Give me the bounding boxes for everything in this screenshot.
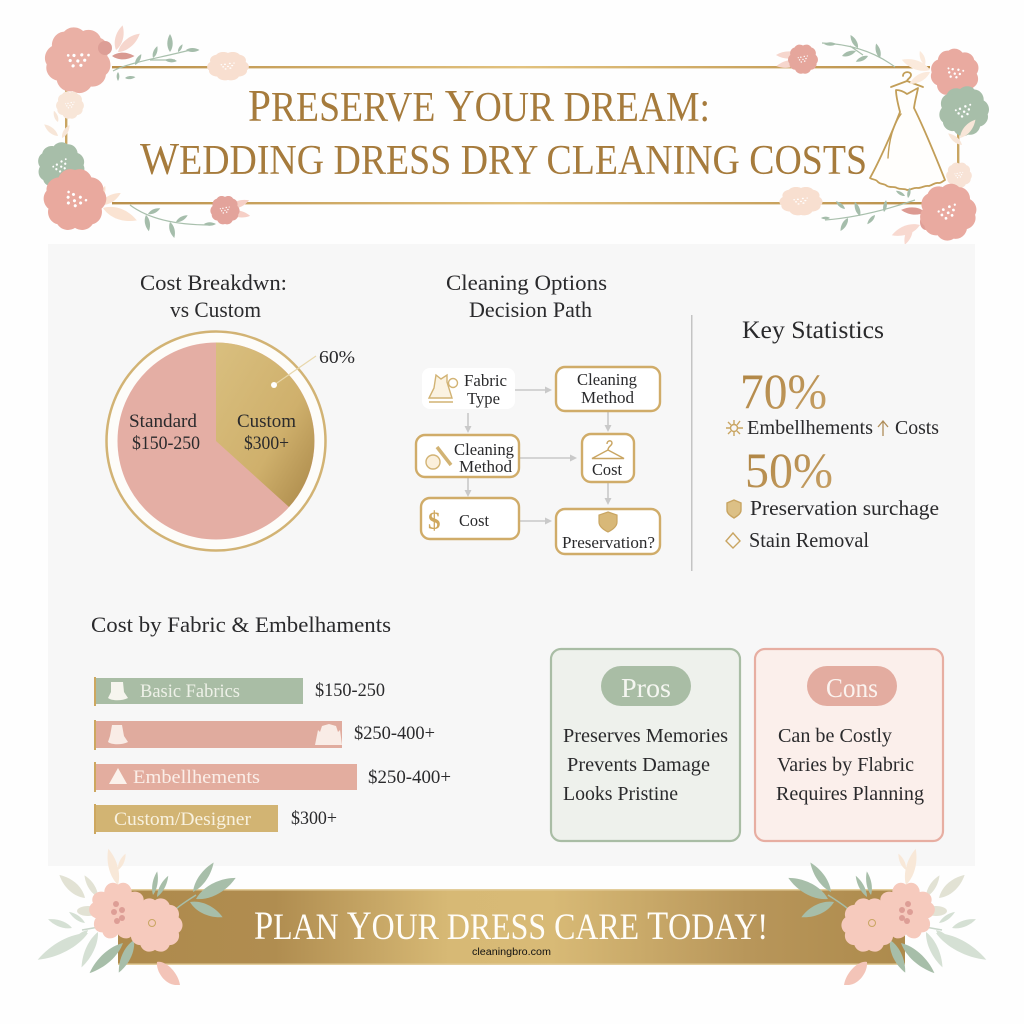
list: cons: Requires Planning xyxy=(776,783,924,805)
node: cleaning method left xyxy=(416,435,519,477)
heading: cleaning options: Cleaning Options xyxy=(446,270,607,295)
node: cost middle xyxy=(582,434,634,482)
node: fabric type: Fabric xyxy=(464,371,507,390)
main panel background xyxy=(48,244,975,866)
stat: 50 percent: Preservation surchage xyxy=(750,496,939,520)
bar: basic fabrics: Basic Fabrics xyxy=(140,681,240,702)
list: cons xyxy=(776,725,924,805)
bar: basic fabrics xyxy=(94,677,385,706)
node: preservation xyxy=(556,509,660,554)
panel: key statistics xyxy=(726,317,939,552)
node: cost lower xyxy=(421,498,519,539)
node: cost lower: $ xyxy=(428,508,440,535)
header frame lines xyxy=(65,66,959,204)
title: WEDDING DRESS DRY CLEANING COSTS xyxy=(140,133,867,184)
pie chart: $150-250 xyxy=(132,433,200,454)
pie chart: Custom xyxy=(237,411,296,432)
list: pros: Preserves Memories xyxy=(563,725,728,747)
list: cons: Varies by Flabric xyxy=(777,754,914,776)
heading: cost breakdown xyxy=(140,270,287,322)
stat: 50 percent: 50% xyxy=(745,442,833,498)
panel: cost breakdown pie xyxy=(106,270,355,550)
badge: pros: Pros xyxy=(621,673,671,703)
bar: embellishments: $250-400+ xyxy=(368,767,451,788)
footer banner xyxy=(118,889,905,965)
footer banner: PLAN YOUR DRESS CARE TODAY! xyxy=(254,903,768,948)
heading: key statistics: Key Statistics xyxy=(742,317,884,344)
list: pros: Prevents Damage xyxy=(567,754,710,776)
heading: cost breakdown: Cost Breakdwn: xyxy=(140,270,287,295)
node: preservation: Preservation? xyxy=(562,533,655,552)
icon: wedding dress on hanger xyxy=(870,72,945,190)
bar: embellishments: Embellhements xyxy=(133,767,260,788)
heading: cleaning options xyxy=(446,270,607,322)
stat: 50 percent xyxy=(727,442,939,520)
heading: cost breakdown: vs Custom xyxy=(170,297,261,322)
pie chart: $300+ xyxy=(244,433,289,454)
heading: cleaning options: Decision Path xyxy=(469,297,592,322)
floral: footer right xyxy=(786,848,989,985)
bar: basic fabrics: $150-250 xyxy=(315,680,385,701)
heading: cost by fabric: Cost by Fabric & Embelhaments xyxy=(91,612,391,637)
node: cost lower: Cost xyxy=(459,511,489,530)
panel: cons xyxy=(755,649,943,841)
divider xyxy=(691,315,692,571)
stat: stain removal: Stain Removal xyxy=(749,528,869,552)
list: pros: Looks Pristine xyxy=(563,783,678,805)
arrows xyxy=(464,386,612,524)
node: cleaning method right: Method xyxy=(581,388,634,407)
bar: custom designer: $300+ xyxy=(291,808,337,829)
node: cleaning method right: Cleaning xyxy=(577,370,637,389)
node: fabric type xyxy=(422,368,515,409)
node: cleaning method left: Cleaning xyxy=(454,440,514,459)
title xyxy=(140,80,867,184)
bar: lace and silk xyxy=(94,720,435,750)
node: cleaning method right xyxy=(556,367,660,411)
bar: custom designer xyxy=(94,804,337,834)
panel: pros xyxy=(551,649,740,841)
node: cost middle: Cost xyxy=(592,460,622,479)
stat: 70 percent xyxy=(726,363,939,439)
stat: 70 percent: Embellhements xyxy=(747,417,873,439)
floral corner: top left xyxy=(27,23,251,249)
title: PRESERVE YOUR DREAM: xyxy=(248,80,710,131)
pie chart: Standard xyxy=(129,411,197,432)
stat: 70 percent: Costs xyxy=(895,417,939,439)
node: cleaning method left: Method xyxy=(459,457,512,476)
pie chart xyxy=(106,332,355,550)
badge: pros xyxy=(601,666,691,706)
list: cons: Can be Costly xyxy=(778,725,893,747)
badge: cons xyxy=(807,666,897,706)
bar: lace and silk: $250-400+ xyxy=(354,723,435,744)
node: fabric type: Type xyxy=(467,389,500,408)
bar: custom designer: Custom/Designer xyxy=(114,809,252,830)
panel: decision path flowchart xyxy=(416,270,660,554)
panel: cost by fabric bars xyxy=(91,612,451,834)
floral corner: right side xyxy=(776,34,996,250)
list: pros xyxy=(563,725,728,805)
bar: embellishments xyxy=(94,762,451,792)
badge: cons: Cons xyxy=(826,673,878,703)
footer banner: cleaningbro.com xyxy=(472,947,551,958)
floral: footer left xyxy=(35,848,238,985)
pie chart: 60% xyxy=(319,347,355,367)
stat: 70 percent: 70% xyxy=(740,363,827,419)
